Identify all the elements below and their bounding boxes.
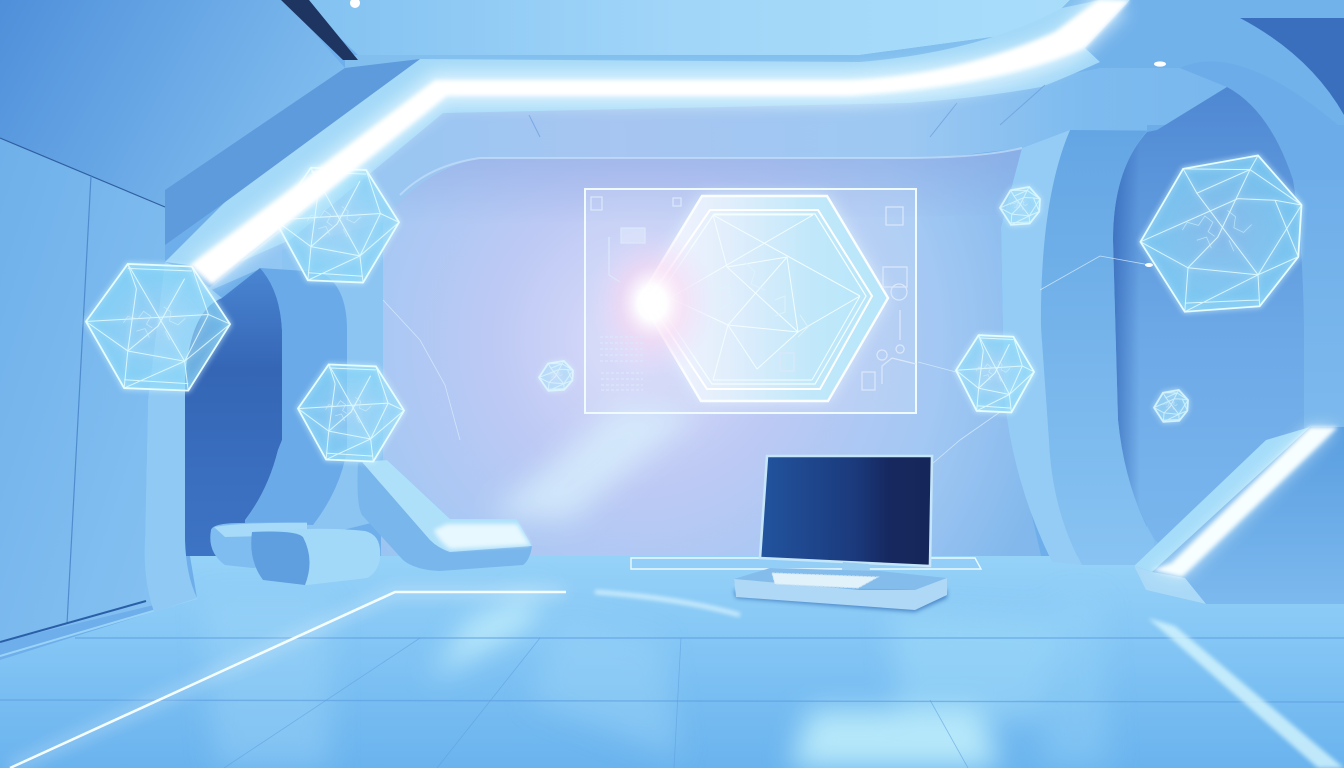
seat: rear ottoman [210, 522, 307, 568]
monitor stand [841, 562, 871, 577]
panel icons [591, 197, 916, 390]
floor reflections [205, 590, 1110, 768]
seat: front ottoman [251, 529, 380, 585]
keyboard [772, 573, 878, 588]
holographic wall panel [383, 189, 1153, 470]
soffit panel seams [529, 85, 1045, 137]
ceiling [0, 0, 1344, 270]
floating crystal polyhedra [86, 156, 1302, 461]
right arch and niche [1001, 18, 1344, 570]
floor [0, 556, 1344, 768]
vault spot light [1154, 61, 1166, 67]
monitor screen [760, 456, 932, 566]
computer monitor and desk [631, 456, 981, 612]
lens flare [588, 227, 716, 379]
ambient light beam [490, 405, 700, 520]
lounge seating [210, 460, 532, 585]
ceiling spot light [350, 0, 360, 8]
soffit band above back wall [200, 48, 1227, 300]
hexagon hologram [640, 196, 888, 401]
left wall panels [0, 138, 197, 656]
back wall [381, 148, 1042, 560]
ceiling light strip [190, 0, 1130, 285]
floor light line [10, 592, 1344, 768]
left arch and dark niche [145, 222, 383, 612]
floor tile grid [0, 638, 1344, 702]
right glowing bench [1134, 427, 1344, 604]
desk [734, 590, 947, 612]
faint connector lines [383, 256, 1150, 470]
ceiling vent [281, 0, 358, 60]
seat: chaise longue [358, 460, 532, 571]
